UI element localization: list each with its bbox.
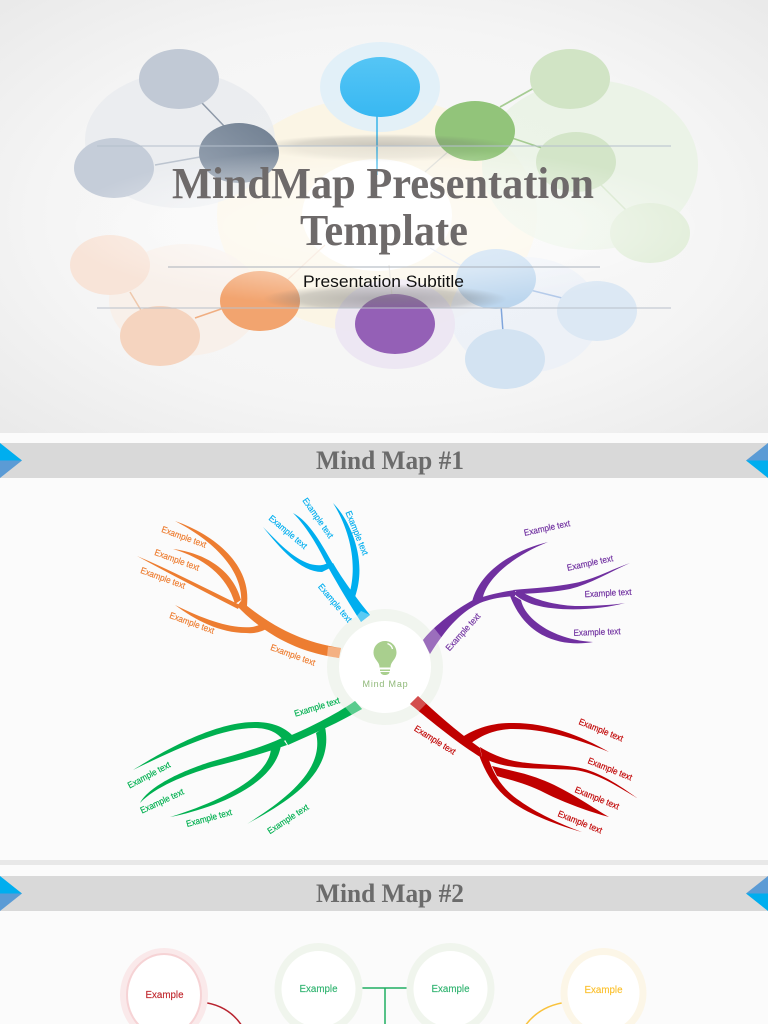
icon: light bulb [374, 641, 396, 675]
centre label: Mind Map [363, 679, 408, 689]
branch: purple: Example text [444, 611, 483, 653]
panel: title slide [0, 0, 768, 433]
node group: orange [70, 235, 325, 366]
shadow at bottom inside title band [270, 285, 500, 308]
branch: orange: Example text [160, 524, 208, 550]
branch: green: Example text [139, 786, 186, 815]
branch: blue: Example text [267, 513, 310, 551]
header band: Mind Map #1: Mind Map #1 [316, 446, 464, 475]
shadow above title band [276, 135, 494, 146]
mind map 2 [120, 943, 646, 1024]
mind map 1 [126, 496, 637, 836]
node: green example left [274, 943, 362, 1024]
branch: red: Example text [412, 723, 458, 757]
branch: purple: Example text [566, 553, 614, 573]
branch: purple: Example text [584, 587, 632, 599]
header band: Mind Map #1 [0, 443, 768, 478]
branch: purple [423, 518, 632, 654]
branch: green: Example text [126, 759, 172, 790]
branch: red: Example text [556, 809, 604, 836]
branch: orange [137, 521, 341, 668]
divider strip [0, 860, 768, 865]
branch: green: Example text [266, 802, 311, 836]
node: green example left: Example [300, 984, 338, 995]
branch: red: Example text [577, 717, 625, 744]
node group: gray [74, 49, 279, 208]
shadow at top inside title band [284, 146, 472, 159]
node: red example [120, 948, 208, 1024]
branch: red: Example text [573, 785, 621, 812]
node group: blue top [320, 42, 440, 175]
branch: blue: Example text [344, 509, 371, 557]
title: MindMap Presentation [172, 159, 594, 208]
branch: blue: Example text [316, 582, 354, 625]
branch: orange: Example text [153, 547, 201, 573]
node: yellow example [560, 948, 646, 1024]
node group: light blue [430, 248, 637, 389]
node: red example: Example [146, 990, 184, 1001]
header band: Mind Map #2: Mind Map #2 [316, 879, 464, 908]
title: Template [300, 206, 468, 255]
centre node [327, 609, 443, 725]
node group: purple [335, 265, 455, 369]
branch: red [410, 696, 637, 836]
branch: blue [263, 496, 371, 625]
node group: green [425, 49, 698, 263]
background halo: yellow centre [217, 97, 537, 333]
node: green example right: Example [432, 984, 470, 995]
branch: orange: Example text [139, 565, 187, 591]
branch: blue: Example text [300, 496, 336, 540]
branch: orange: Example text [269, 642, 317, 668]
connectors [201, 988, 568, 1024]
translucent title band [60, 146, 710, 308]
branch: green: Example text [293, 695, 341, 719]
branch: red: Example text [586, 756, 634, 783]
branch: orange: Example text [168, 610, 216, 636]
subtitle: Presentation Subtitle [303, 272, 464, 291]
branch: green: Example text [185, 807, 233, 829]
branch: purple: Example text [573, 626, 621, 638]
branch: purple: Example text [523, 518, 571, 538]
header band: Mind Map #2 [0, 876, 768, 911]
branch: green [126, 695, 362, 836]
node: green example right [406, 943, 494, 1024]
node: yellow example: Example [584, 985, 623, 996]
